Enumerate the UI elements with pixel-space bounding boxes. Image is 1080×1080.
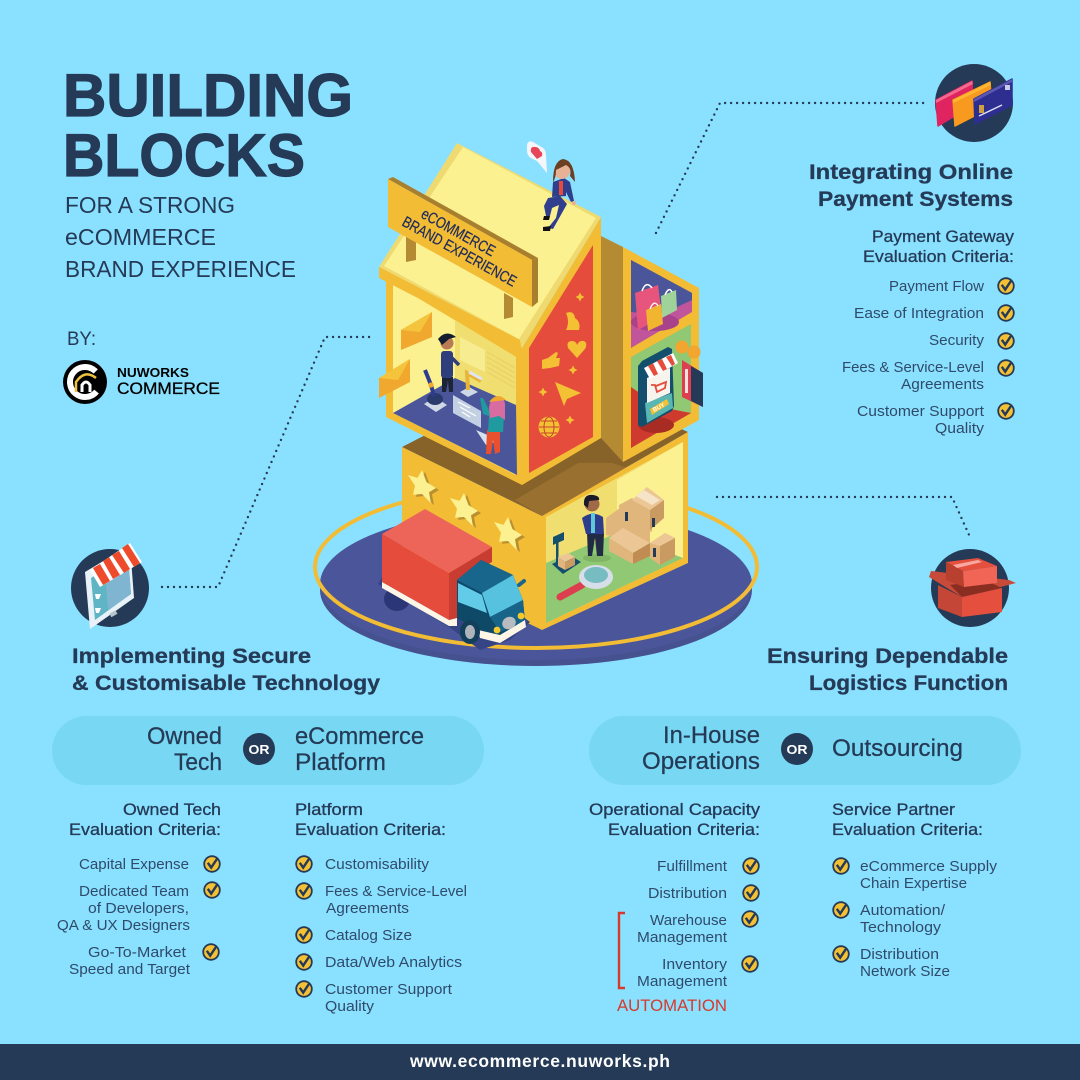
checklist: owned tech: Dedicated Team	[79, 884, 189, 900]
criteria heading: service partner: Service Partner	[832, 801, 956, 819]
checklist: payment gateway: Quality	[935, 421, 985, 437]
checklist: operational capacity: Inventory	[662, 957, 728, 973]
logo: Nuworks Commerce: COMMERCE	[117, 379, 220, 398]
dotted connector: payment	[656, 103, 928, 233]
checklist: payment gateway: Agreements	[901, 377, 984, 393]
by label: BY:	[67, 329, 96, 350]
house body	[379, 217, 601, 485]
criteria heading: service partner	[832, 801, 983, 839]
heading: technology: & Customisable Technology	[72, 671, 380, 695]
checklist: operational capacity: Distribution	[648, 886, 727, 902]
criteria heading: platform: Evaluation Criteria:	[295, 821, 446, 839]
scale	[552, 532, 581, 574]
criteria heading: platform: Platform	[295, 801, 363, 819]
panel: owned tech or platform: Owned	[147, 723, 222, 750]
criteria heading: platform	[295, 801, 446, 839]
panel: owned tech or platform	[52, 716, 484, 785]
checklist: payment gateway: Security	[929, 333, 985, 349]
checklist: platform: Customisability	[325, 857, 430, 873]
criteria heading: operational capacity	[589, 801, 761, 839]
man with crossed arms	[582, 495, 611, 562]
checklist: platform: Customer Support	[325, 982, 452, 998]
checklist: service partner: eCommerce Supply	[860, 859, 998, 875]
checklist: service partner: Network Size	[860, 964, 950, 980]
subtitle: FOR A STRONG	[65, 192, 235, 218]
icon: tablet storefront	[71, 543, 149, 629]
checklist: operational capacity: Fulfillment	[657, 859, 727, 875]
woman on roof with heart bubble	[527, 141, 576, 231]
criteria heading: operational capacity: Evaluation Criteria:	[608, 821, 760, 839]
criteria heading: payment gateway: Evaluation Criteria:	[863, 248, 1014, 266]
sign: eCommerce Brand Experience: BRAND EXPERIENCE	[399, 214, 519, 291]
checklist: operational capacity: Management	[637, 974, 727, 990]
panel: in-house or outsourcing	[589, 716, 1021, 785]
panel: in-house or outsourcing: Outsourcing	[832, 735, 963, 762]
heading: technology: Implementing Secure	[72, 644, 311, 668]
magnifier	[560, 565, 613, 597]
checklist: operational capacity: Warehouse	[650, 913, 727, 929]
sign: eCommerce Brand Experience	[388, 177, 538, 319]
criteria heading: service partner: Evaluation Criteria:	[832, 821, 983, 839]
subtitle	[65, 192, 296, 282]
smartphone storefront	[638, 347, 678, 427]
coins and credit card	[676, 340, 703, 407]
checklist: platform: Fees & Service-Level	[325, 884, 467, 900]
checklist: service partner: Chain Expertise	[860, 876, 967, 892]
holographic screen	[453, 395, 498, 445]
title: BLOCKS	[63, 122, 305, 189]
shopping bags	[631, 285, 679, 331]
icon: credit cards	[935, 64, 1013, 142]
footer bar: www.ecommerce.nuworks.ph	[409, 1051, 670, 1071]
platform disk	[315, 486, 757, 666]
checklist: platform: Data/Web Analytics	[325, 955, 462, 971]
stars	[411, 465, 525, 555]
man with robot arms	[424, 333, 482, 412]
logo: Nuworks Commerce: NUWORKS	[117, 366, 189, 380]
checklist: service partner: Distribution	[860, 947, 939, 963]
criteria heading: owned tech: Evaluation Criteria:	[69, 821, 221, 839]
criteria heading: owned tech: Owned Tech	[123, 801, 221, 819]
heading: payment systems: Integrating Online	[809, 160, 1013, 184]
checklist: payment gateway: Customer Support	[857, 404, 984, 420]
panel: in-house or outsourcing: Operations	[642, 748, 760, 775]
gable wall with social icons	[522, 217, 601, 485]
envelopes	[379, 312, 432, 398]
checklist: platform: Quality	[325, 999, 375, 1015]
checklist: operational capacity: Management	[637, 930, 727, 946]
subtitle: eCOMMERCE	[65, 224, 216, 250]
checklist: payment gateway: Fees & Service-Level	[842, 360, 984, 376]
panel: in-house or outsourcing: In-House	[663, 722, 760, 749]
panel: owned tech or platform: OR	[248, 742, 270, 757]
checklist: owned tech: Capital Expense	[79, 857, 189, 873]
checklist: payment gateway: Payment Flow	[889, 279, 984, 295]
checklist: platform	[295, 855, 467, 1015]
checklist: payment gateway: Ease of Integration	[854, 306, 984, 322]
panel: owned tech or platform: Tech	[174, 749, 222, 776]
icon: open box	[929, 549, 1016, 627]
heading: logistics: Logistics Function	[809, 671, 1008, 695]
checklist: platform: Agreements	[326, 901, 409, 917]
checklist: owned tech: Speed and Target	[69, 962, 190, 978]
criteria heading: payment gateway	[863, 228, 1015, 266]
panel: owned tech or platform: Platform	[295, 749, 386, 776]
footer bar	[0, 1044, 1080, 1080]
checklist: owned tech	[57, 855, 221, 978]
delivery truck	[378, 509, 530, 650]
panel: in-house or outsourcing: OR	[786, 742, 808, 757]
checklist: service partner	[832, 857, 998, 980]
lower block: warehouse	[402, 410, 688, 630]
automation label: AUTOMATION	[617, 997, 727, 1015]
automation bracket	[619, 913, 625, 988]
heading: payment systems: Payment Systems	[818, 187, 1013, 211]
criteria heading: payment gateway: Payment Gateway	[872, 228, 1015, 246]
subtitle: BRAND EXPERIENCE	[65, 256, 296, 282]
checklist: platform: Catalog Size	[325, 928, 412, 944]
sign: eCommerce Brand Experience: eCOMMERCE	[418, 206, 498, 260]
checklist: service partner: Technology	[860, 920, 942, 936]
cardboard boxes	[606, 487, 675, 565]
criteria heading: owned tech	[69, 801, 221, 839]
checklist: service partner: Automation/	[860, 903, 946, 919]
dotted connector: logistics	[717, 497, 970, 537]
panel: owned tech or platform: eCommerce	[295, 723, 424, 750]
roof	[379, 143, 601, 352]
isometric building illustration	[315, 141, 757, 666]
criteria heading: operational capacity: Operational Capacity	[589, 801, 761, 819]
heading: logistics	[767, 644, 1008, 695]
smartphone storefront: BUY	[652, 403, 666, 414]
checklist: owned tech: of Developers,	[88, 901, 189, 917]
checklist: payment gateway	[842, 277, 1015, 437]
title: BUILDING	[63, 62, 353, 129]
checklist: owned tech: Go-To-Market	[88, 945, 186, 961]
woman with laptop	[480, 396, 506, 454]
right tower: shop	[601, 236, 703, 462]
logo: Nuworks Commerce	[63, 360, 220, 404]
checklist: operational capacity	[637, 857, 760, 990]
heading: technology	[72, 644, 380, 695]
heading: payment systems	[809, 160, 1013, 211]
dotted connector: technology	[162, 337, 370, 587]
checklist: owned tech: QA & UX Designers	[57, 918, 190, 934]
heading: logistics: Ensuring Dependable	[767, 644, 1008, 668]
title	[63, 62, 353, 189]
